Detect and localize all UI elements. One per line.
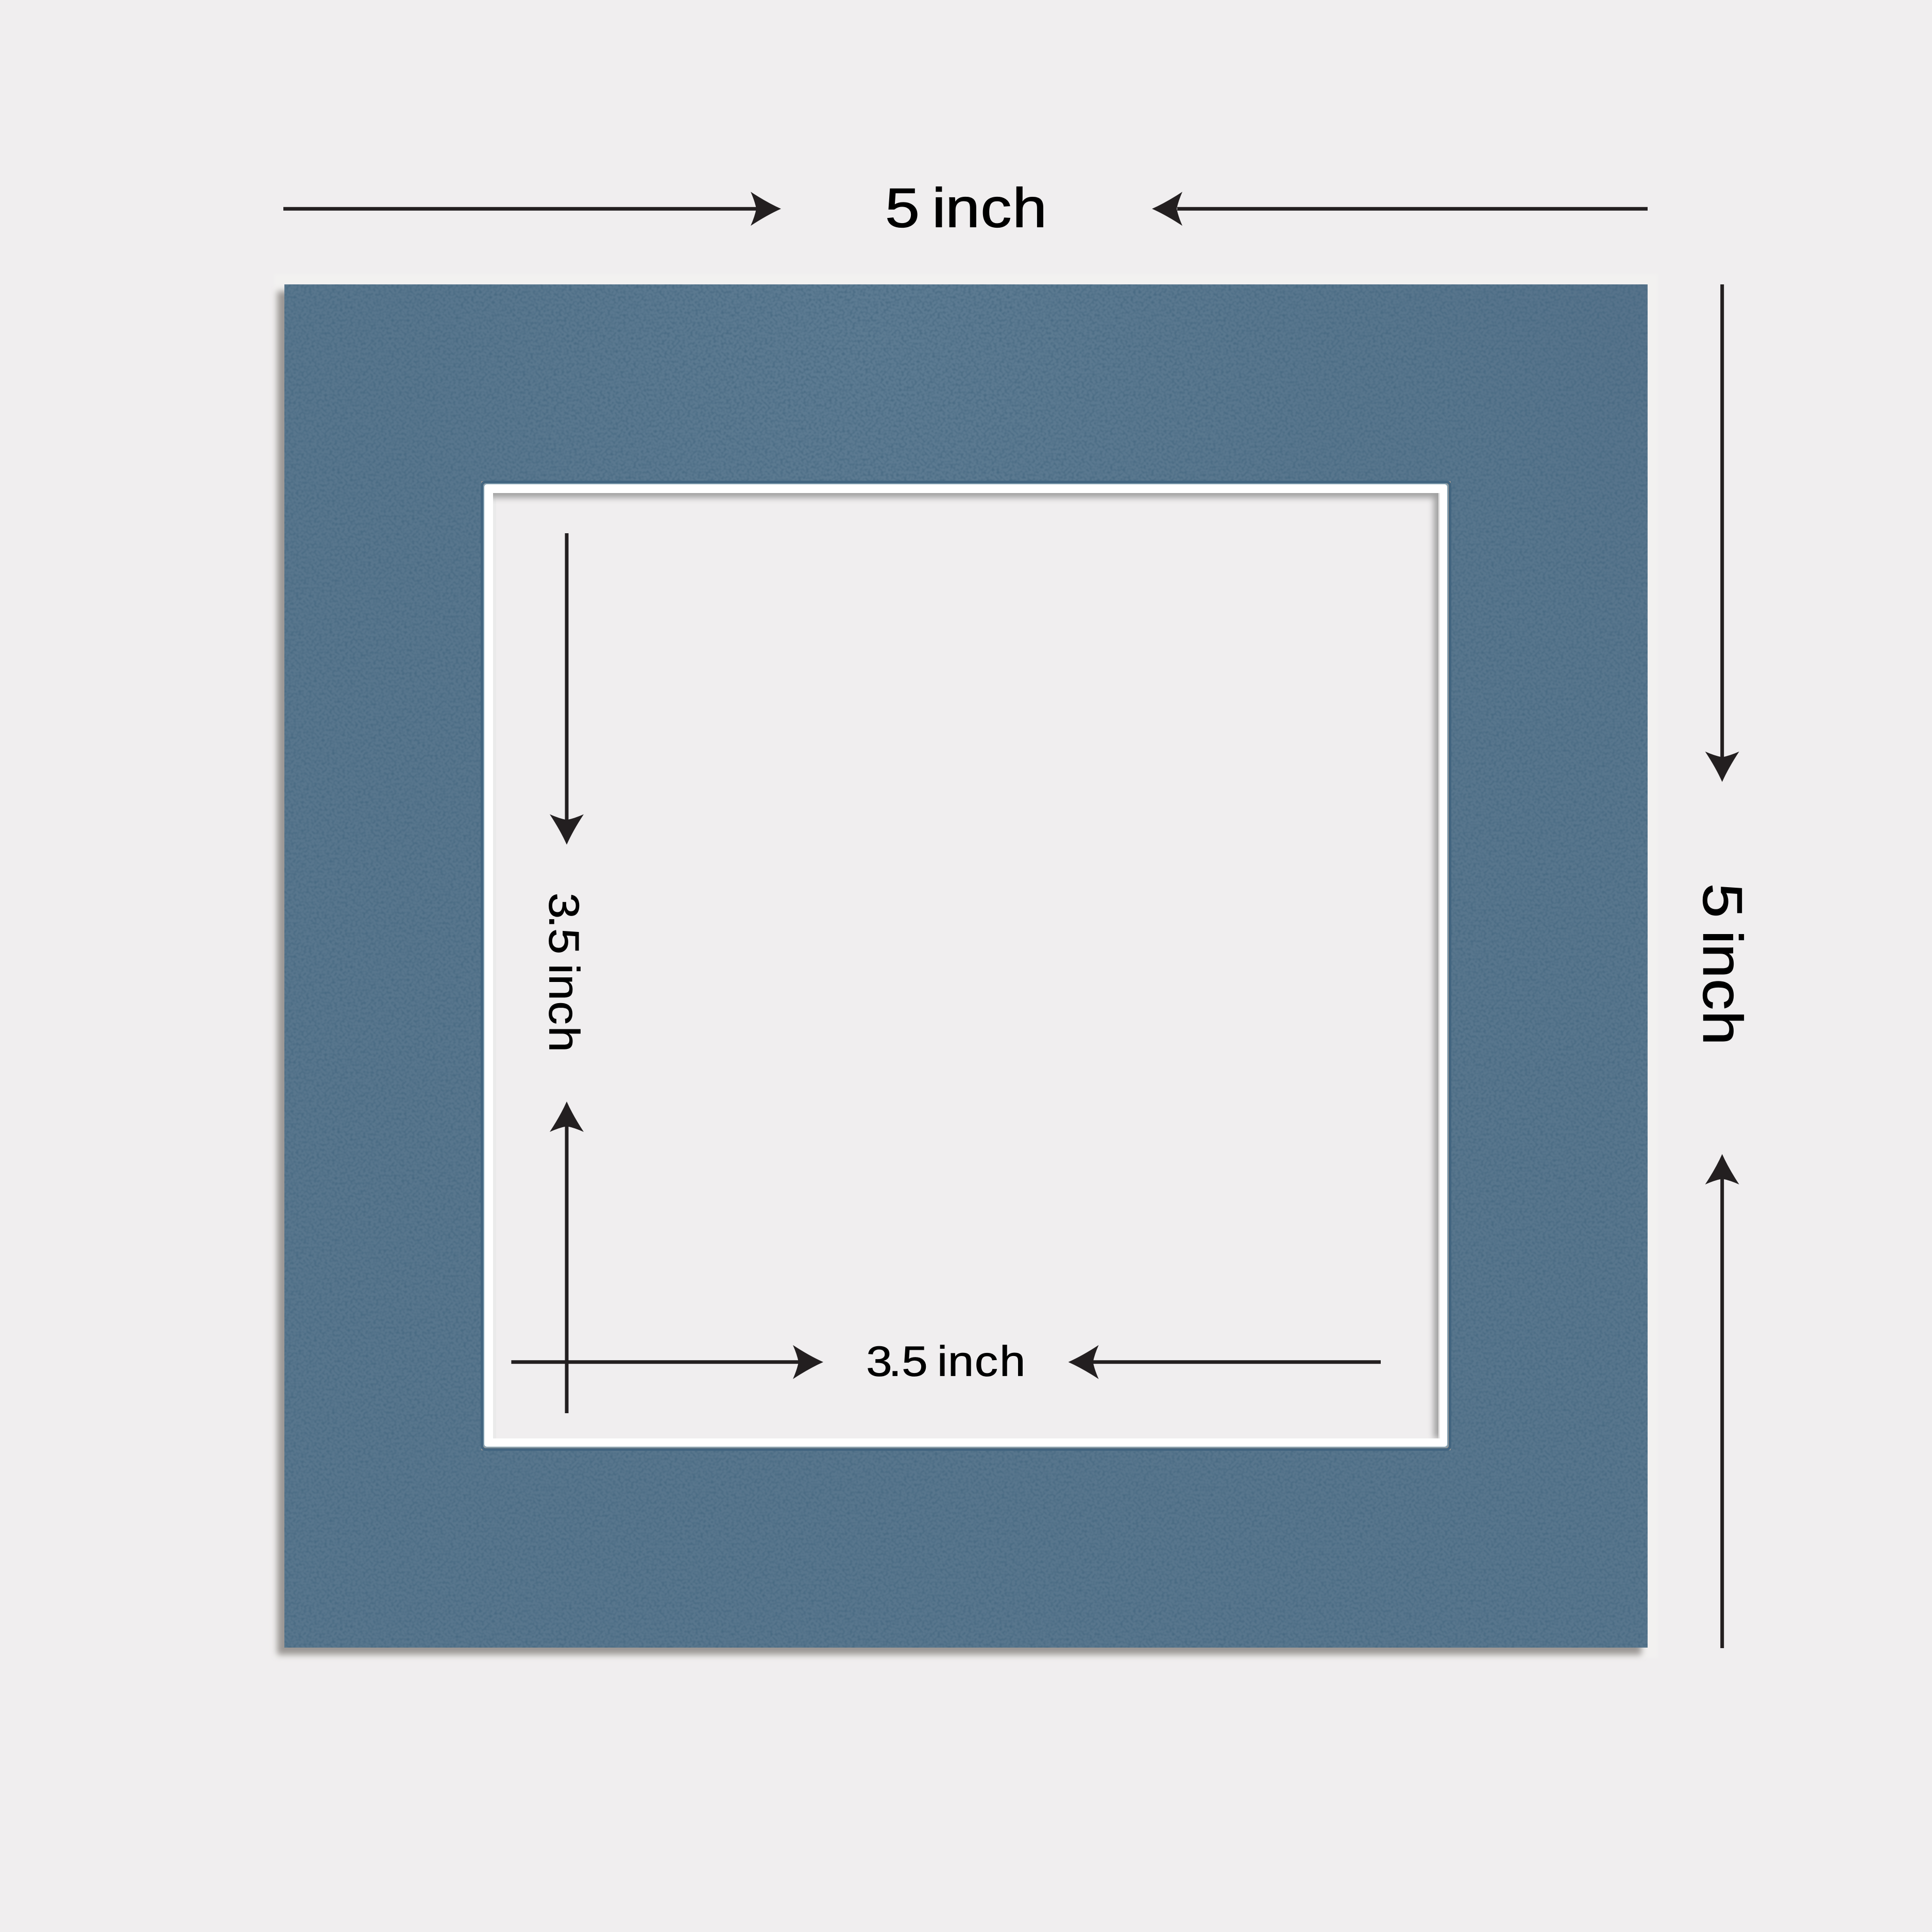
text: inner width label: 3.5 inch bbox=[866, 1338, 1025, 1385]
heading: right height label: 5 inch bbox=[1691, 884, 1753, 1045]
arrow: top left, pointing right bbox=[283, 192, 781, 226]
arrow: inner bottom, pointing right bbox=[511, 1345, 823, 1379]
text: inner height label: 3.5 inch bbox=[540, 893, 587, 1052]
panel: window opening with white bevel bbox=[474, 474, 1458, 1450]
panel: blue photo mat with drop shadow bbox=[274, 274, 1658, 1658]
heading: top width label: 5 inch bbox=[885, 178, 1047, 239]
arrow: right side, pointing up bbox=[1705, 1154, 1739, 1648]
arrow: top right, pointing left bbox=[1152, 192, 1648, 226]
arrow: right side, pointing down bbox=[1705, 284, 1739, 782]
arrow: inner left, pointing up bbox=[550, 1101, 584, 1413]
arrow: inner left, pointing down bbox=[550, 533, 584, 845]
arrow: inner bottom, pointing left bbox=[1069, 1345, 1381, 1379]
